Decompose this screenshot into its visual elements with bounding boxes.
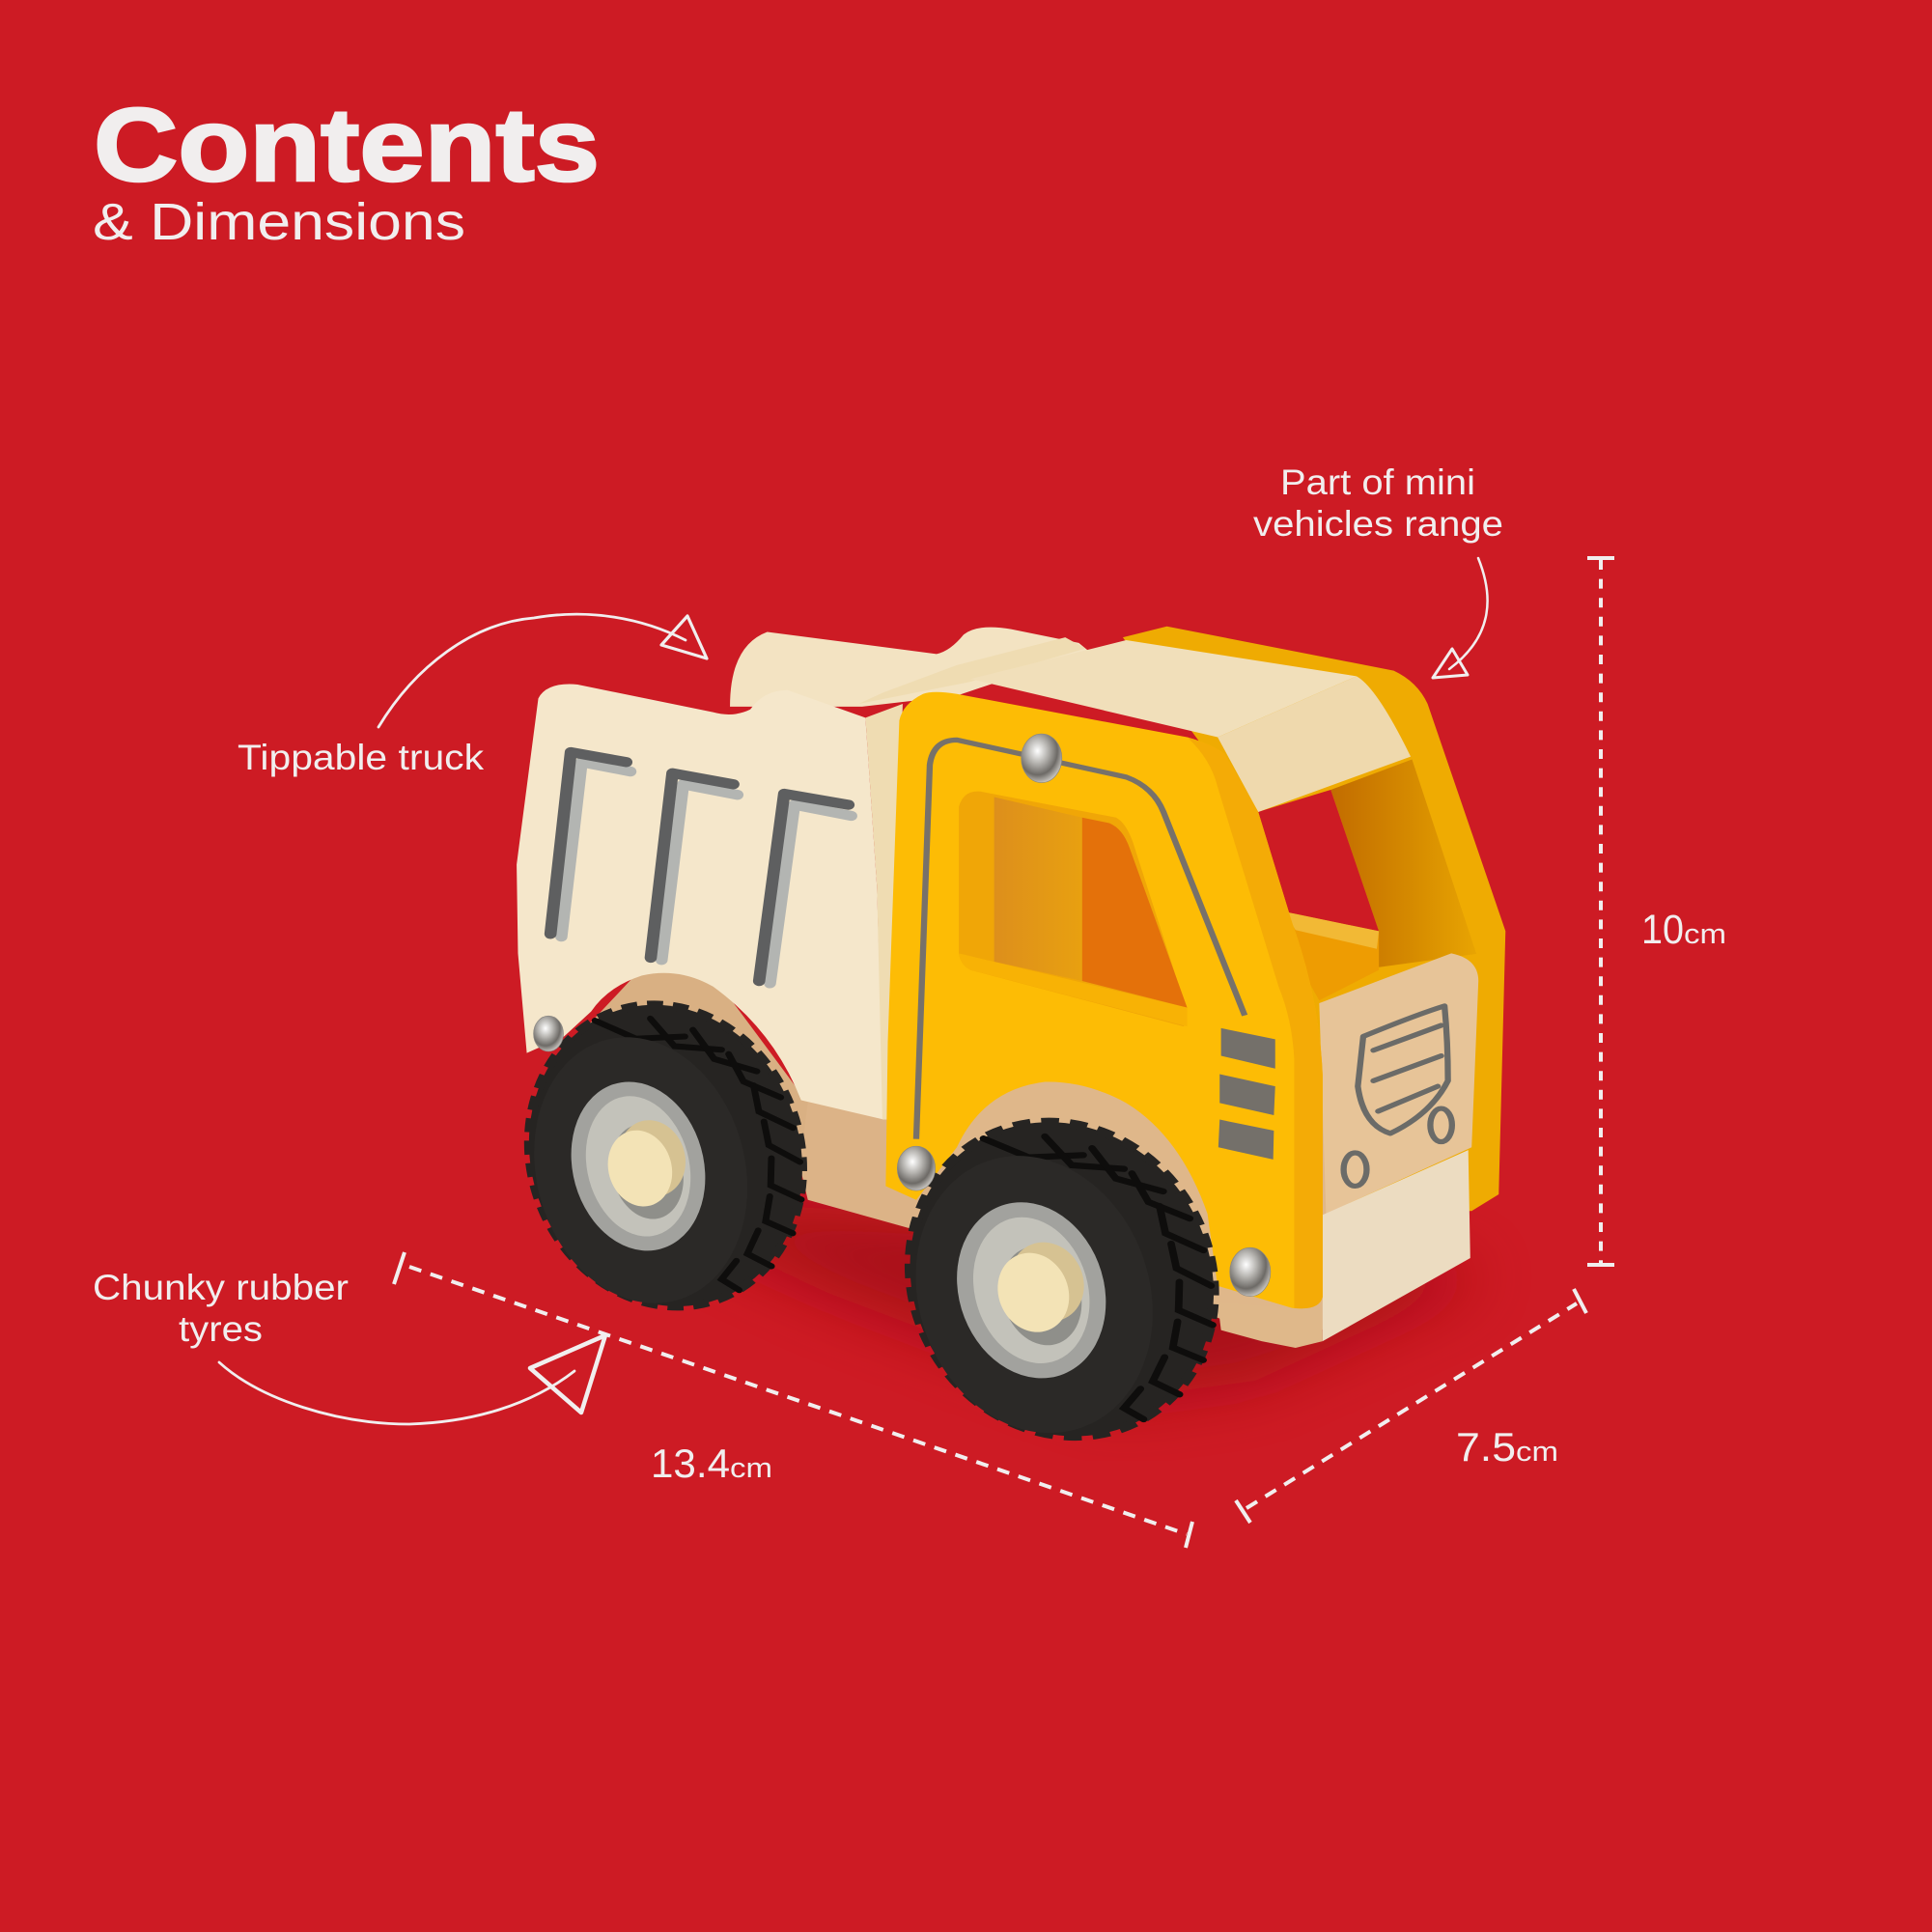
tipper side panel	[517, 685, 883, 1120]
rear frame of cab	[1123, 627, 1505, 1211]
front wheel	[881, 1103, 1244, 1456]
dimension: depth 7.5cm	[1236, 1289, 1586, 1523]
roof	[970, 640, 1411, 812]
title	[93, 86, 600, 251]
callout: Chunky rubber tyres: tyres	[179, 1309, 263, 1349]
callout: Chunky rubber tyres: Chunky rubber	[93, 1268, 349, 1307]
arrow: tyres	[219, 1335, 605, 1424]
rear wheel arch	[577, 965, 808, 1153]
grille block	[1319, 953, 1478, 1214]
shadow under truck	[618, 1197, 1487, 1400]
truck illustration	[502, 627, 1505, 1456]
dimension: height 10cm: cm	[1684, 919, 1726, 950]
tipper stripes	[550, 752, 852, 983]
heading: Contents: Contents	[94, 86, 600, 203]
dimension: length 13.4cm: 13.4	[651, 1441, 730, 1486]
bumper	[1218, 1150, 1470, 1348]
dimension: length 13.4cm: cm	[730, 1453, 772, 1484]
arrow: tippable	[378, 614, 707, 727]
arrow: mini vehicles	[1433, 558, 1488, 678]
dimension: depth 7.5cm: 7.5	[1456, 1424, 1516, 1470]
callout: Tippable truck: Tippable truck	[238, 738, 485, 777]
cab window	[959, 792, 1188, 1026]
dimension: depth 7.5cm: cm	[1516, 1437, 1558, 1468]
tipper edge	[858, 637, 1085, 1120]
dimension: length 13.4cm	[394, 1252, 1192, 1548]
cab vents	[1218, 1028, 1275, 1160]
front arch wood	[950, 1080, 1330, 1330]
callout: Chunky rubber tyres	[93, 1268, 605, 1424]
subheading: & Dimensions: & Dimensions	[93, 193, 465, 251]
door pinstripe	[916, 740, 1245, 1139]
dimension: height 10cm: 10	[1641, 907, 1684, 953]
wooden chassis	[781, 1086, 957, 1242]
callout: Part of mini vehicles range: Part of mini	[1280, 462, 1475, 502]
yellow cab front	[885, 692, 1323, 1308]
dimension: height 10cm	[1587, 558, 1726, 1265]
callout: Part of mini vehicles range: vehicles range	[1253, 504, 1503, 544]
far side of tipper	[730, 628, 1089, 707]
metal bolts	[534, 734, 1271, 1297]
rear wheel	[502, 986, 829, 1326]
callout: Part of mini vehicles range	[1253, 462, 1503, 678]
callout: Tippable truck	[238, 614, 707, 777]
